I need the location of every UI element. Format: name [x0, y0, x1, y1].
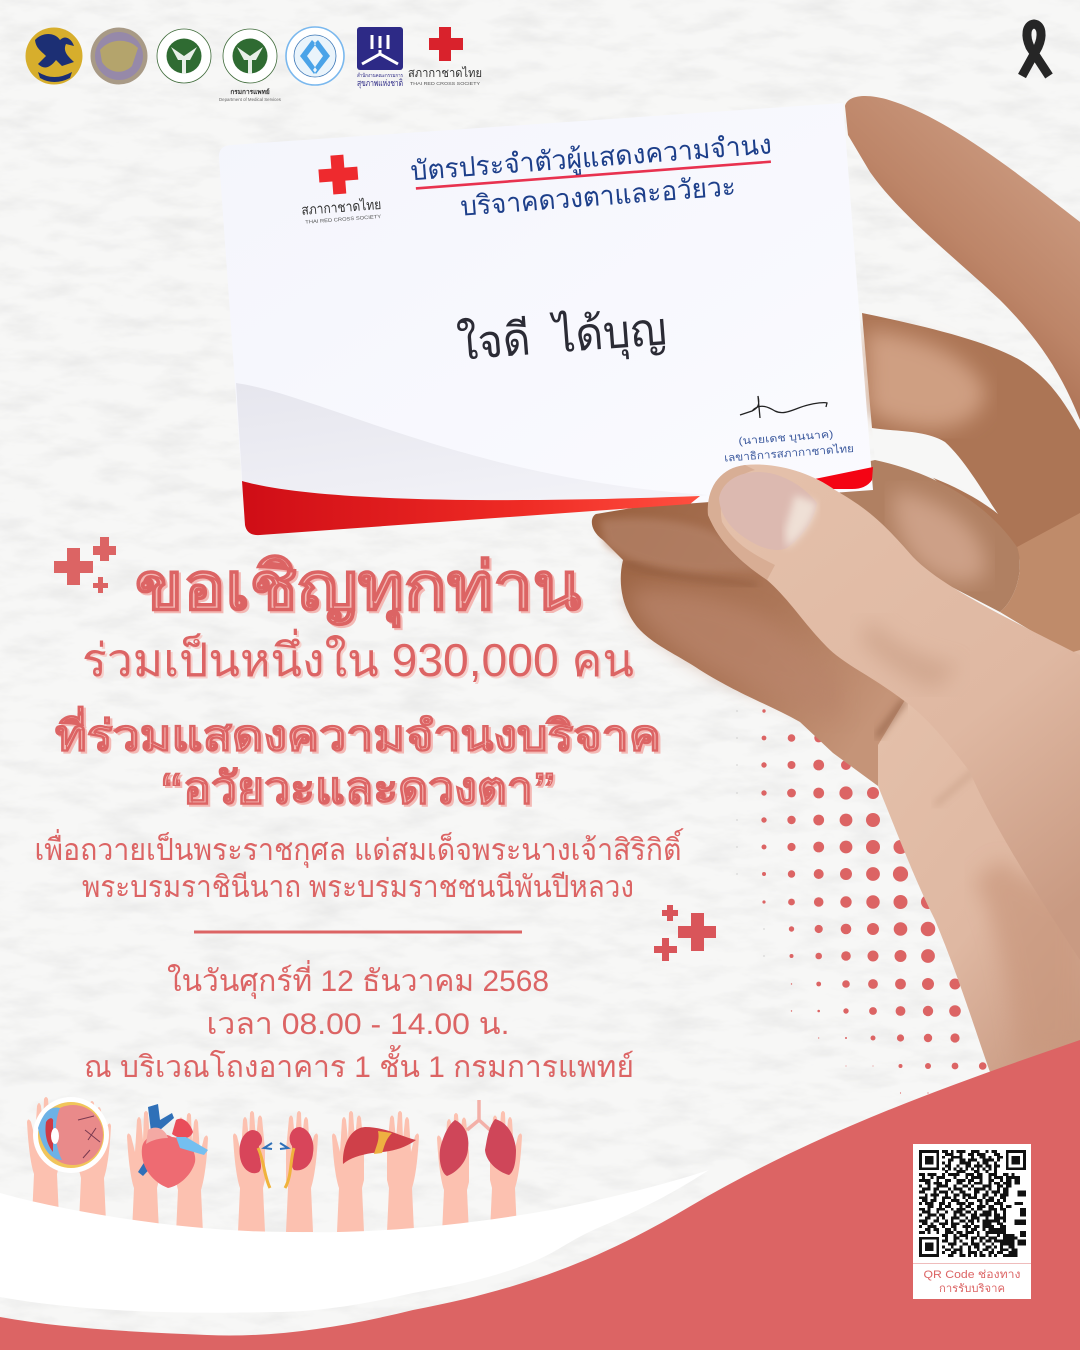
thumb: [708, 464, 1080, 960]
heading: organs and eyes: “อวัยวะและดวงตา”: [160, 764, 556, 813]
ring finger: [740, 460, 1020, 612]
card name: ใจดี ได้บุญ: [455, 302, 669, 373]
bottom wave: white: [0, 1170, 709, 1313]
dedication text: เพื่อถวายเป็นพระราชกุศล แด่สมเด็จพระนางเจ้าสิริกิติ์: [34, 828, 684, 869]
photo: hand holding the card: [592, 96, 1080, 1072]
card title: บัตรประจำตัวผู้แสดงความจำนง: [409, 129, 773, 187]
organ: lungs: [437, 1100, 522, 1234]
logo: thai transplant blue: [286, 27, 344, 85]
logo: thai red cross: THAI RED CROSS SOCIETY: [410, 81, 480, 86]
logo: purple seal: [90, 28, 148, 84]
plus cluster right: [654, 905, 716, 961]
organ: liver: [332, 1111, 419, 1232]
event details: เวลา 08.00 - 14.00 น.: [206, 1008, 510, 1041]
logo: department seal gold: [26, 28, 82, 84]
index finger: [845, 96, 1080, 420]
card cross logo: [297, 152, 382, 226]
organ: eye: [27, 1097, 111, 1222]
card red corner: [800, 467, 873, 489]
card signatory: [723, 427, 854, 465]
logo strip: [26, 27, 482, 102]
dedication text: [34, 828, 684, 904]
card grey swoosh: [236, 383, 708, 535]
organ: heart: [127, 1104, 208, 1234]
event details: ณ บริเวณโถงอาคาร 1 ชั้น 1 กรมการแพทย์: [84, 1045, 634, 1084]
QR caption: [924, 1269, 1020, 1295]
subheading: 930,000 people: ร่วมเป็นหนึ่งใน 930,000 คน: [82, 628, 634, 686]
logo: national health commission: สุขภาพแห่งชาติ: [357, 78, 403, 89]
thumbnail: [719, 472, 817, 550]
lower fingers: [592, 490, 905, 786]
icon: plus cluster top: [54, 537, 116, 593]
logo: thai red cross: สภากาชาดไทย: [408, 66, 482, 80]
QR code panel: [913, 1144, 1031, 1299]
logo: department of medical services: Department of Medical Services: [219, 97, 281, 102]
card cross logo: THAI RED CROSS SOCIETY: [305, 214, 382, 226]
halftone dot pattern: [736, 709, 986, 1094]
gap between fingers: [872, 428, 998, 514]
QR code: [919, 1150, 1026, 1257]
QR caption: การรับบริจาค: [939, 1283, 1005, 1295]
card signatory: เลขาธิการสภากาชาดไทย: [724, 442, 854, 465]
heading: invitation: ขอเชิญทุกท่าน: [135, 549, 581, 628]
donor card: [219, 103, 873, 535]
event details: [84, 960, 634, 1084]
organ: kidneys: [233, 1111, 318, 1232]
logo: department of medical services: กรมการแพทย์: [230, 88, 270, 96]
card red strip: [242, 481, 700, 535]
card signatory: (นายเดช บุนนาค): [738, 428, 834, 448]
QR caption: QR Code ช่องทาง: [924, 1269, 1020, 1281]
logo: national health commission: [357, 27, 403, 89]
heading block: [34, 549, 684, 904]
card title: บริจาคดวงตาและอวัยวะ: [459, 171, 737, 222]
event details: ในวันศุกร์ที่ 12 ธันวาคม 2568: [167, 960, 549, 1000]
logo: national health commission: สำนักงานคณะกรรมการ: [357, 72, 403, 79]
logo: thai red cross: [408, 27, 482, 86]
card cross logo: สภากาชาดไทย: [301, 196, 382, 218]
little finger: [1000, 513, 1080, 660]
organs held by hands: [27, 1097, 522, 1234]
middle finger: [862, 313, 1080, 560]
divider: [194, 930, 522, 934]
logo: department of medical services: [219, 29, 281, 102]
icon: mourning ribbon: [1022, 24, 1049, 76]
palm: [878, 650, 1080, 1072]
heading: pledge: ที่ร่วมแสดงความจำนงบริจาค: [55, 706, 661, 759]
bottom wave: red: [0, 1040, 1080, 1350]
logo: ministry of public health: [157, 29, 211, 83]
dedication text: พระบรมราชินีนาถ พระบรมราชชนนีพันปีหลวง: [82, 871, 634, 904]
card title: [409, 129, 776, 225]
card signature: [740, 396, 827, 418]
